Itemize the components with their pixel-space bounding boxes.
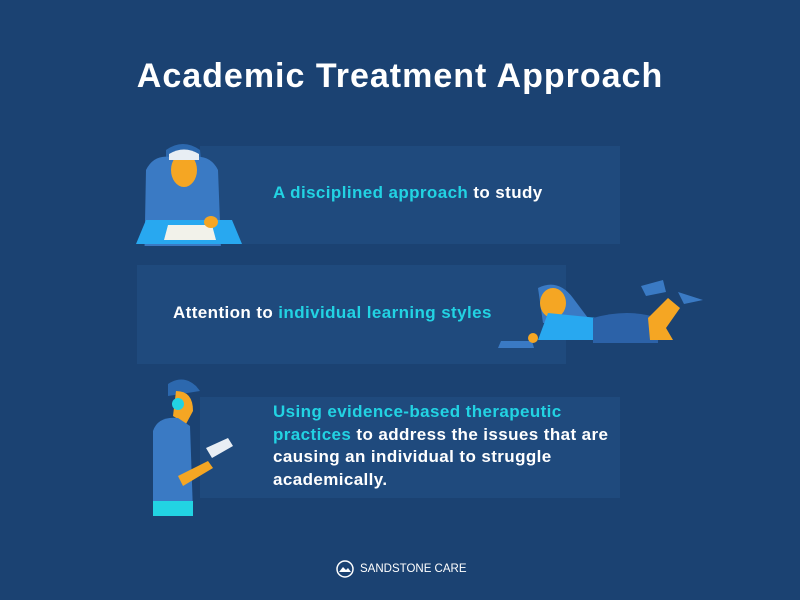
icon: girl lying down writing	[498, 280, 703, 348]
logo: Sandstone Care: SANDSTONE CARE	[360, 563, 467, 575]
panel: learning styles	[137, 265, 566, 364]
logo: Sandstone Care	[336, 560, 467, 578]
panel: disciplined approach	[200, 146, 620, 244]
text: evidence-based: practices to address the issues that are	[273, 424, 608, 444]
icon: woman reading at desk	[136, 144, 242, 246]
icon: man with headphones and tablet	[153, 380, 233, 516]
text: evidence-based: causing an individual to struggle	[273, 447, 552, 466]
title: Academic Treatment Approach	[137, 57, 663, 95]
text: evidence-based	[273, 402, 608, 488]
text: evidence-based: Using evidence-based therapeutic	[273, 402, 562, 421]
text: evidence-based: academically.	[273, 470, 388, 488]
panel: evidence-based	[200, 397, 620, 498]
text: disciplined approach: A disciplined approach to study	[273, 183, 543, 202]
text: learning styles: Attention to individual learning styles	[173, 303, 492, 322]
